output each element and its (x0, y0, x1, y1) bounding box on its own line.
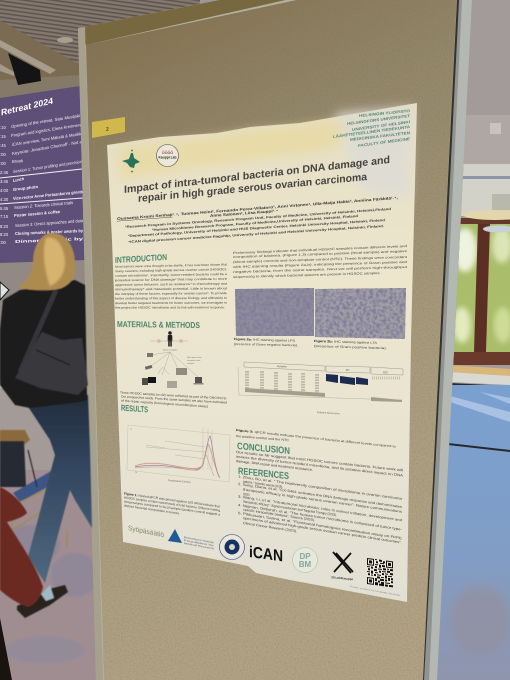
text: reference list: (2020). (243, 492, 250, 497)
methods workflow diagram: integration and (187, 359, 200, 362)
schedule rows: :00 (0, 161, 6, 166)
schedule rows: 2:45 (0, 170, 9, 175)
figure 3: dot plot: Samples (277, 365, 287, 368)
text: introduction body: develop better targeted treatments for better outcomes, we investigate in (115, 301, 227, 305)
schedule rows: Program and logistics, Elena Kremneva (11, 122, 83, 138)
text: reference list: 2. Sang, Diana, et al. "CX-5461 activates the DNA damage response and demonstrates (238, 482, 402, 509)
text: reference list: therapeutic efficacy". Signal transduction and Targeted Therapy (2023). (243, 500, 337, 517)
schedule rows: Session 3: Omics approaches and data (15, 218, 84, 228)
schedule rows: :00 (0, 240, 6, 245)
text: preliminary findings: with IHC staining results (Figure 2a,b), indicating the presence of Gram positive and (233, 260, 407, 269)
yellow number note: 2 (106, 127, 109, 133)
authors: Oussama Kromi Senhaji ¹˒⁴, Tuomas Heini², Fernando Perez-Villatoro¹, Anni Virtanen³, Ulla-Maija Haltia³, Anniina Färkkilä¹˒⁴, (117, 196, 398, 221)
methods workflow diagram: Multi-omics data (187, 356, 202, 359)
background: left side of the room (0, 0, 200, 680)
schedule rows: 8:20 (0, 224, 9, 229)
text: conclusion body: damage, DNA repair and treatment resistance. (236, 459, 313, 472)
text: reference list: patients." Scientific reports (2019). (243, 480, 283, 489)
schedule rows: :45 (0, 143, 6, 148)
text: reference list: 1. Zhou, Bo, et al. " The biodiversity composition of microbiome in ovarian carcinoma (238, 475, 402, 501)
text: introduction body: immunotherapy⁴ and metastatic potential. Little is known about (115, 286, 227, 291)
caption: figure 2b: (presence of Gram positive bacteria). (314, 344, 387, 350)
schedule rows: Vice-rector Anne Portaankorva greets (13, 189, 84, 201)
logo: Kauppi Lab (156, 144, 178, 166)
text: reference list: 3. Wang, Li, et al. "Intratumoral microbiota: roles in cancer initiation, development and (238, 495, 402, 522)
yellow number note (92, 117, 125, 138)
text: introduction body: better understanding of this aspect of disease biology, and ultimately to (115, 296, 227, 300)
caption: figure 2a: Figure 2a: IHC staining against LPS (234, 337, 295, 343)
affiliations: ³Department of Pathology, University of Helsinki and HUS Diagnostic Center, Helsinki University Hospital, Helsinki, Finland (128, 218, 385, 238)
figure 2a: IHC image LPS (235, 288, 314, 336)
text: reference list (238, 475, 403, 545)
handbag (15, 290, 88, 395)
figure 1: melting curve chart: Temperature (Celsius) (168, 479, 191, 484)
figure 3: dot plot (238, 362, 403, 415)
schedule rows: 4:30 (0, 197, 9, 202)
text: conclusion body: Our results so far suggest that most HGSOC tumors contain bacteria. Future work will (236, 450, 403, 472)
jacket (0, 280, 87, 408)
text: reference list: specimens of advanced high-grade serous ovarian cancer predicts clinical outcomes". (243, 516, 402, 545)
text: preliminary findings: negative bacteria, from the same samples. Next we will perform high-throughput (233, 265, 407, 274)
text: conclusion body (236, 450, 404, 478)
text: introduction body: potential source for DNA damage² that may contribute to more (115, 277, 227, 282)
text: preliminary findings (233, 244, 407, 279)
projected schedule screen (0, 86, 86, 263)
logo: DPBM: DP (299, 552, 311, 561)
caption: figure 1: temperatures compared to fecal sample (positive control) suggest a (124, 500, 220, 516)
text: introduction body: contain microbiome¹. Importantly, tumor-resident bacteria could be a (115, 272, 227, 278)
chair (0, 430, 67, 547)
authors (117, 196, 398, 221)
heading: references: REFERENCES (238, 466, 289, 482)
text: introduction body: aggressive tumor behavior, such as resistance³ to chemotherapy and (115, 282, 227, 287)
text: introduction body: this project the HGSOC microbiome and its link with treatment response. (115, 305, 225, 310)
schedule rows: Closing remarks & poster awards by (15, 228, 84, 236)
university name header: MEDICINSKA FAKULTETEN (350, 131, 410, 142)
schedule rows: :10 (0, 125, 6, 130)
icon: patient (168, 331, 172, 346)
text: methods description: Three HGSOC samples (n=42) were collected as part of the ONCOSYS- (120, 391, 227, 400)
logo: blue triangle foundation (168, 529, 215, 551)
heading: conclusion: CONCLUSION (237, 441, 290, 457)
university name header (333, 109, 411, 148)
heading: materials and methods: MATERIALS & METHODS (117, 319, 200, 330)
window (450, 218, 510, 365)
text: reference list: 5. Pikkusaari, Sanna, et al. "Functional homologous recombination assay on FFPE (238, 511, 403, 541)
schedule rows: 8:20 (0, 232, 9, 237)
affiliations: ⁴iCAN digital precision cancer medicine flagship, University of Helsinki and Helsinki University Hospital, Helsinki, Finland. (128, 224, 384, 244)
title: Impact of intra-tumoral bacteria on DNA damage and (124, 154, 390, 196)
caption: figure 3 (236, 428, 396, 449)
schedule rows: Break (12, 158, 24, 164)
caption: figure 2b: Figure 2b: IHC staining against LTA (314, 339, 378, 345)
text: introduction body: the interplay of these factors, especially for ovarian cancer⁵. To provide (115, 291, 227, 296)
ceiling light (57, 37, 73, 43)
logo: iCAN: iCAN (249, 543, 283, 565)
text: methods description: Ovi prospective study. From the same samples we also have estimated (121, 395, 227, 405)
university name header: UNIVERSITY OF HELSINKI (352, 120, 410, 132)
figure 1: melting curve chart: 70 (135, 472, 137, 474)
heading: introduction: INTRODUCTION (115, 252, 167, 265)
foreground dark clothing (0, 618, 12, 680)
foreground person in maroon (0, 487, 43, 607)
text: methods description: of the repair capacity (homologous recombination assay) (121, 399, 208, 409)
text: introduction body (115, 262, 227, 310)
methods workflow diagram: Tumor samples (162, 348, 178, 352)
woman seen from behind with bag (0, 233, 92, 618)
logo: blue triangle foundation: Biomedicum Helsinki (184, 536, 215, 545)
caption: figure 2a: (presence of Gram negative bacteria). (234, 342, 298, 347)
schedule rows: :15 (0, 134, 6, 139)
screen heading: Retreat 2024 (1, 96, 53, 117)
text: preliminary findings: (blood sample) controls and non-template control (NTC). These findings were concordant (233, 255, 407, 264)
schedule rows: Poster session & coffee (14, 209, 61, 218)
text: introduction body: many cancers, including high-grade serous ovarian cancer (HGSOC), (115, 267, 227, 273)
logo: DPBM (292, 548, 318, 572)
schedule rows: Group photo (13, 184, 38, 192)
tablet held by someone (0, 282, 9, 300)
affiliations: ¹Research Program in Systems Oncology, Research Program Unit, Faculty of Medicine, University of Helsinki, Helsinki,Finland (125, 207, 391, 229)
ceiling lamp (463, 210, 510, 232)
caption: figure 1: distinct bacterial composition in tumors. (124, 504, 180, 516)
university name header: LÄÄKETIETEELLINEN TIEDEKUNTA (333, 125, 410, 139)
board surface (86, 0, 457, 680)
caption: figure 1: Figure 1: Nested qPCR was primed against 16S rRNA indicate that (124, 492, 220, 508)
schedule rows (0, 113, 84, 245)
methods workflow diagram (142, 331, 204, 388)
logo: X handle (331, 552, 353, 581)
caption: figure 2b (314, 339, 387, 350)
background: right side of the room (430, 0, 510, 680)
title: repair in high grade serous ovarian carcinoma (138, 171, 367, 205)
logo: Kauppi Lab: Kauppi Lab (159, 156, 176, 160)
heading: results: RESULTS (121, 403, 148, 414)
schedule rows: :00 (0, 152, 6, 157)
poster board frame (78, 0, 473, 680)
shoe (17, 585, 68, 618)
carpet (430, 385, 510, 680)
text: reference list: Clinical Cancer Research (2023). (243, 521, 297, 533)
schedule rows: iCAN overview, Tomi Mäkelä & Marikki (12, 131, 82, 147)
figure 3: dot plot: NTC (383, 372, 388, 374)
schedule rows: 7:15 (0, 214, 9, 219)
figure 3: dot plot: Endpoint fluorescence (317, 411, 340, 415)
caption: figure 2a (234, 337, 298, 347)
logo: Kauppi Lab: ÖÖÖÖ (162, 150, 173, 155)
text: reference list: therapeutic efficacy in high-grade serous ovarian cancer". Nature communications (243, 488, 402, 514)
text: preliminary findings: sequencing to identify which bacterial species are present in HGSOC samples . (233, 271, 382, 279)
university name header: HELSINGIN YLIOPISTO (359, 109, 410, 118)
text: preliminary findings: Preliminary findings indicate that individual HGSOC samples contain different levels and (233, 244, 407, 255)
text: reference list: 4. Nejman, Deborah, et al. "The human tumor microbiome is composed of tumor type- (238, 503, 402, 532)
schedule rows: Session 1: Tumor profiling and precision (13, 159, 83, 174)
logo: round seal (220, 534, 244, 560)
copyright line: Poster printed by Unigrafia Helsinki (350, 585, 401, 597)
QR code (367, 558, 393, 587)
text: preliminary findings: composition of bacteria. (Figure 1,3) compared to positive (fecal sample) and negative (233, 249, 407, 259)
affiliations: ²Human Microbiome Research Program, Faculty of Medicine,University of Helsinki, Helsinki, Finland (152, 214, 358, 232)
jeans (25, 395, 92, 583)
university name header: FACULTY OF MEDICINE (358, 137, 411, 148)
schedule rows: Opening of the retreat, Satu Mustjoki (11, 113, 80, 129)
logo: Syöpäsäätiö: Syöpäsäätiö (128, 525, 164, 539)
caption: figure 3: the positive control and the NTC. (236, 434, 290, 442)
schedule rows: Keynote: Jonathan Chernoff - Not a (12, 139, 83, 156)
projector (8, 53, 41, 85)
text: methods description (120, 391, 227, 409)
logo: DPBM: BM (299, 560, 312, 569)
schedule rows: Lunch (13, 176, 24, 183)
schedule rows: 4:00 (0, 188, 9, 193)
caption: figure 1: HGSOC samples contain varied levels of total bacteria. Different melting (124, 496, 220, 512)
schedule rows: 3:45 (0, 179, 9, 184)
text: reference list: specific intracellular bacteria". Science (2020). (243, 508, 315, 522)
methods workflow diagram: analysis (187, 363, 194, 365)
schedule rows: Session 2: Towards clinical trials (14, 200, 73, 210)
logo: blue triangle foundation: Foundation for (184, 539, 214, 547)
caption: figure 3: Figure 3: qPCR results indicate the presence of bacteria at different levels compared to (236, 428, 396, 449)
panel: poster sheet (107, 103, 417, 602)
figure 2b: IHC image LTA (315, 288, 406, 339)
logo: university flame (122, 150, 140, 172)
schedule rows: Dinner & music by (15, 236, 84, 244)
authors: Anne Salonen², Liisa Kauppi¹˒⁴ (210, 209, 278, 218)
text: conclusion body: assess the diversity of tumor-resident microbiota, and its putative direct impact on DNA (236, 455, 404, 478)
figure 1: melting curve chart (127, 425, 230, 484)
affiliations (125, 207, 391, 244)
caption: figure 1 (124, 492, 220, 516)
university name header: HELSINGFORS UNIVERSITET (347, 114, 411, 126)
hair (18, 233, 75, 290)
logo: blue triangle foundation: Medical Research (184, 542, 215, 551)
schedule rows: 5:45 (0, 206, 9, 211)
text: introduction body: Most tumors were once thought to be sterile, it has now been shown that (115, 262, 227, 269)
figure 1: melting curve chart: 75 (130, 429, 132, 431)
logo: X handle: @LabKauppi (331, 575, 353, 581)
figure 3: dot plot: PC (346, 369, 350, 372)
